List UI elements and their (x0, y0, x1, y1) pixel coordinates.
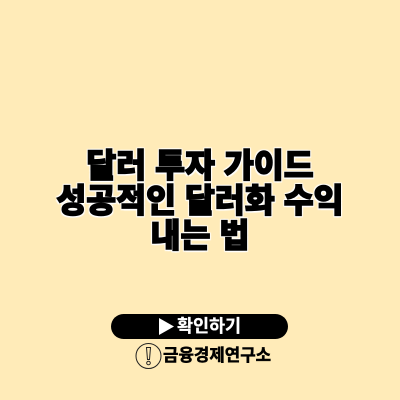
button: confirm (111, 314, 288, 339)
button label: 확인하기 (177, 316, 241, 336)
brand name: 금융경제연구소 (163, 346, 271, 365)
title: 성공적인 달러화 수익 (56, 183, 344, 219)
logo: 금융경제연구소 (136, 343, 271, 369)
title: 달러 투자 가이드 (86, 148, 314, 184)
title (56, 146, 344, 254)
title: 내는 법 (151, 218, 249, 254)
icon: play arrow (159, 318, 174, 335)
icon: exclamation circle (136, 343, 162, 369)
